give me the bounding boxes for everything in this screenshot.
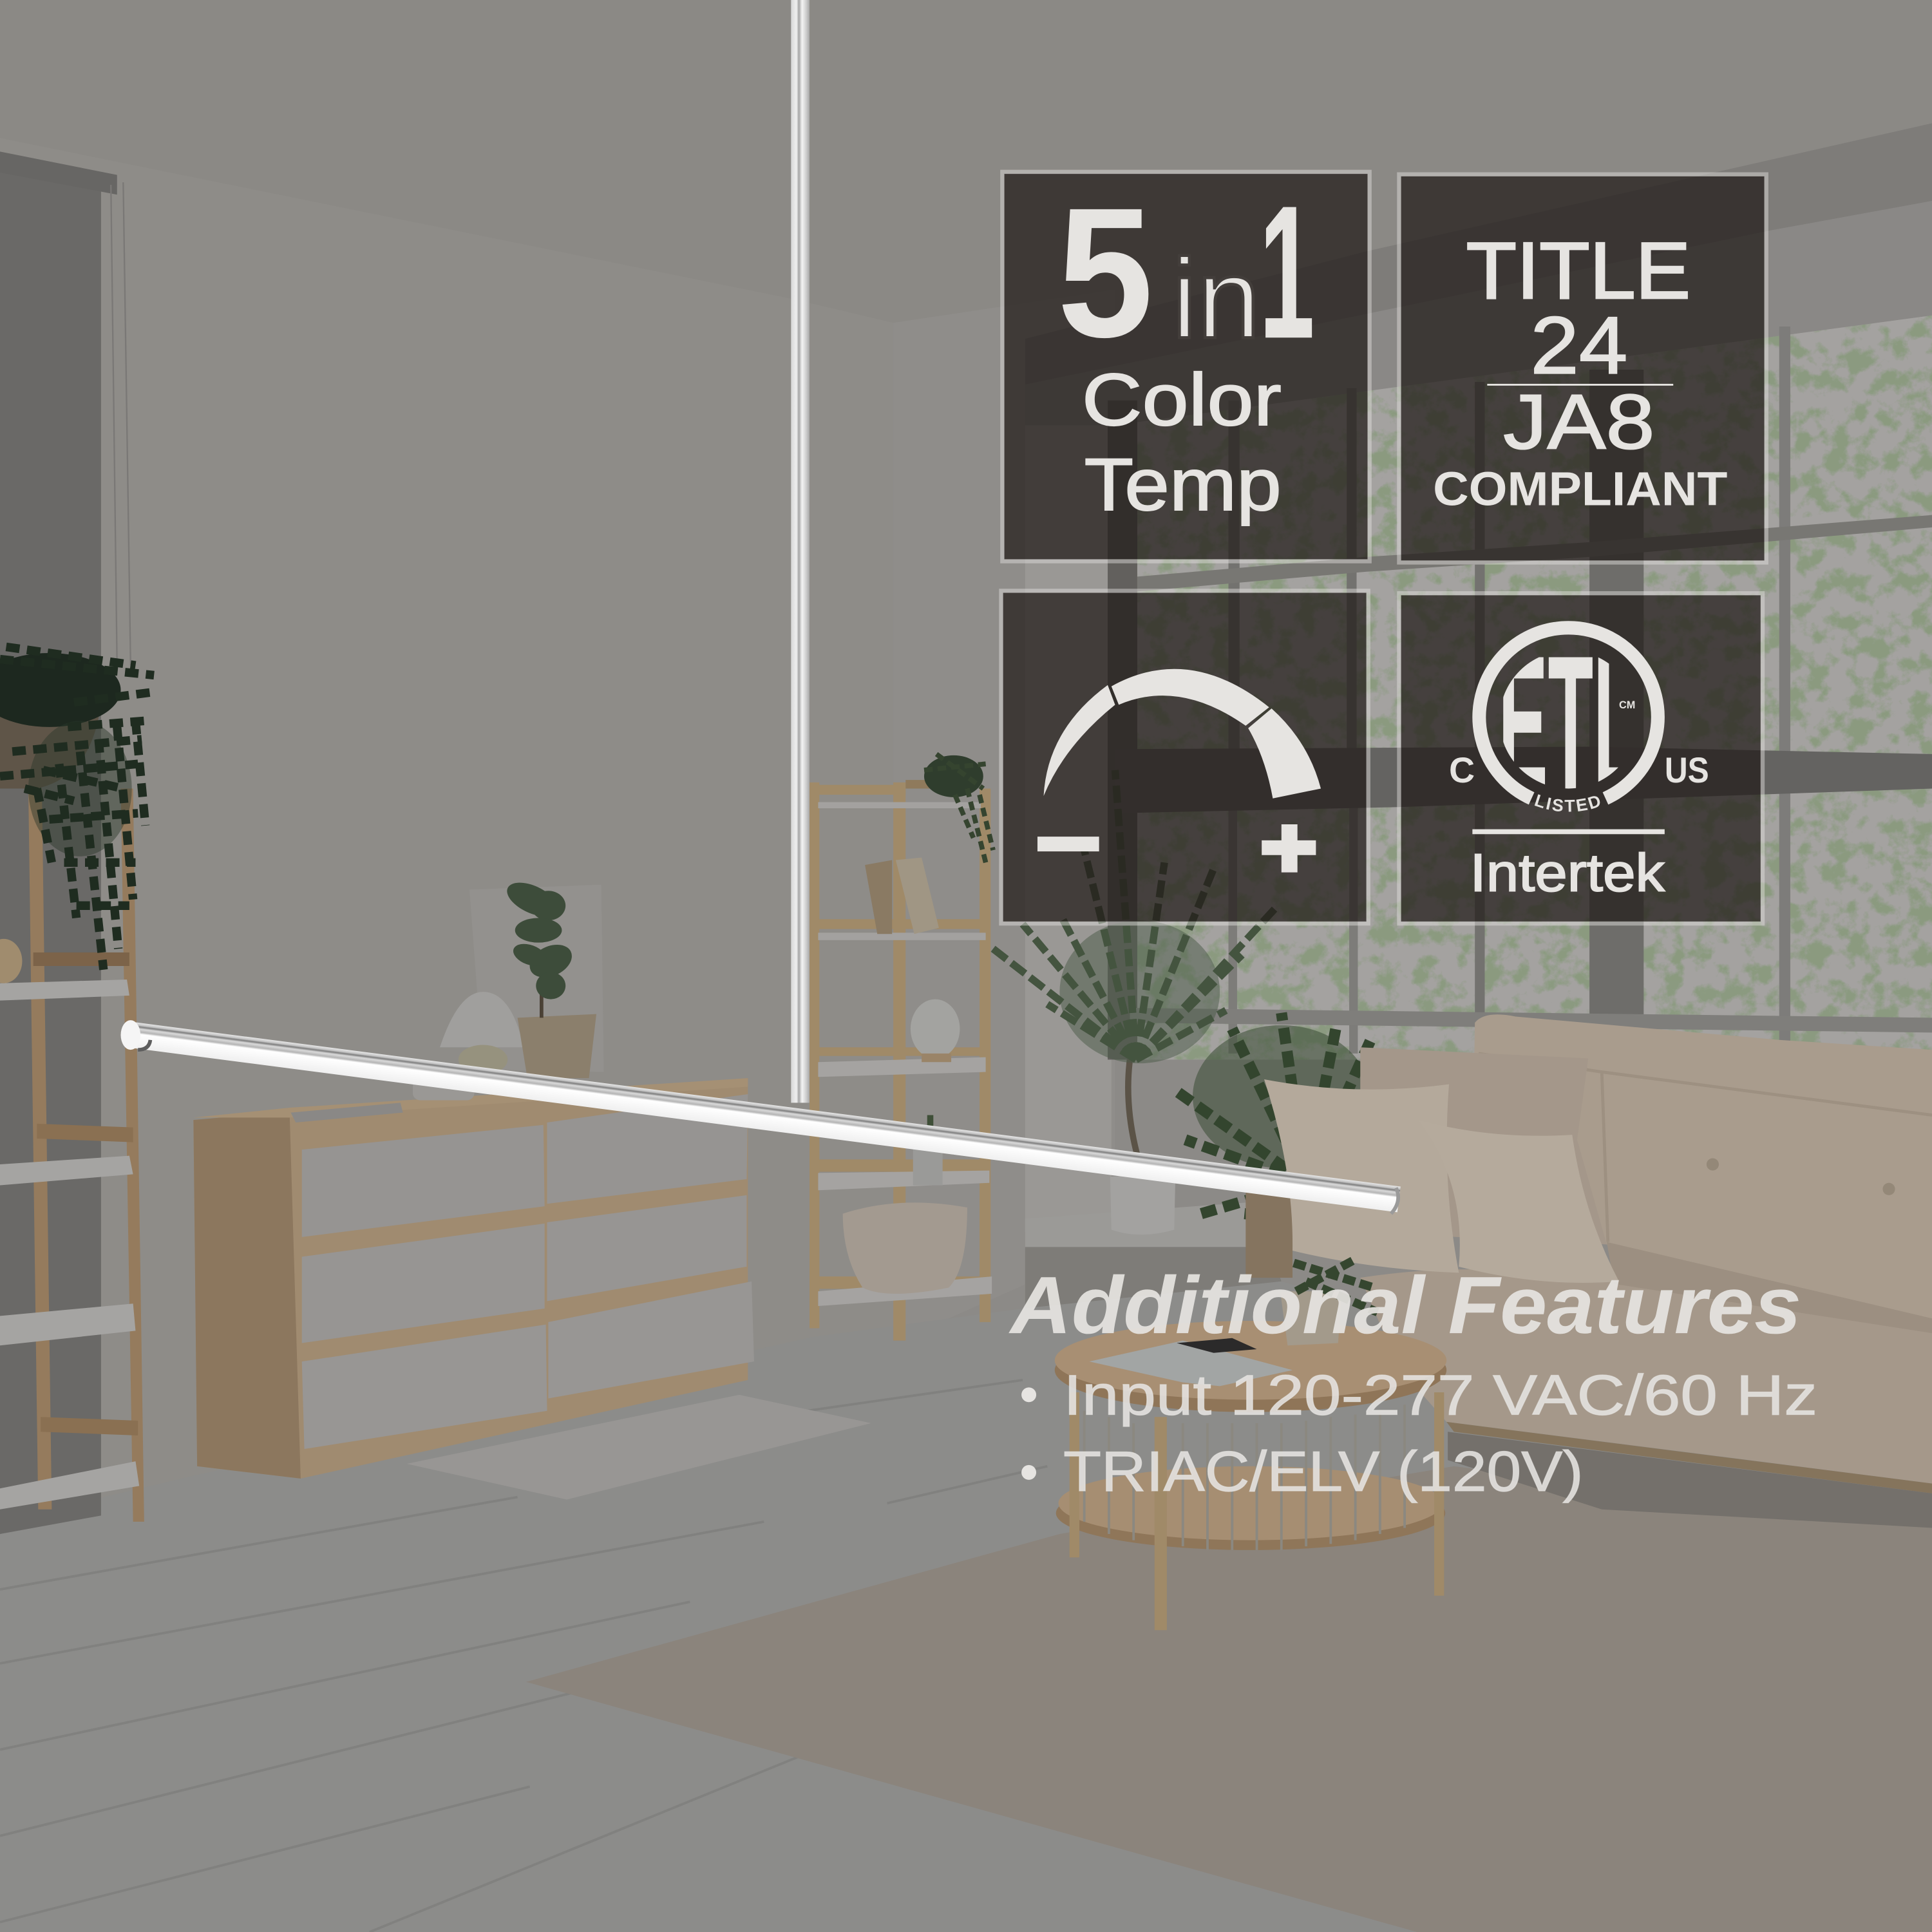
icon: plus: [1262, 824, 1316, 873]
color temp label: [1082, 359, 1282, 526]
fiddle leaf foliage: [502, 876, 577, 999]
hanging plant: [0, 647, 154, 970]
phone: [1177, 1338, 1257, 1353]
pillow: [1418, 1120, 1619, 1283]
wall beside window: [1025, 419, 1112, 1232]
left window blind: [0, 151, 131, 1534]
panel: 5 in 1 color temp: [1002, 166, 1370, 561]
white planter: [1110, 1173, 1175, 1235]
tree leaves: [993, 770, 1278, 1059]
bullet list: TRIAC/ELV (120V): [1063, 1439, 1584, 1503]
wood sofa frame: [1245, 1191, 1293, 1278]
icon: ETL listed mark: C: [1449, 750, 1475, 790]
dresser: [193, 1078, 754, 1479]
icon: minus: [1037, 837, 1099, 851]
seat cushion: [1360, 1269, 1932, 1484]
icon: dimming gauge: [1044, 669, 1321, 799]
leafy plant behind sofa: [1175, 1013, 1370, 1220]
left shelving unit: [0, 788, 144, 1522]
JA8 compliant text: COMPLIANT: [1433, 461, 1727, 515]
sofa: [1245, 1014, 1932, 1493]
tablet on dresser: [291, 1103, 403, 1122]
basket: [843, 1202, 967, 1294]
right shelving unit: [810, 754, 993, 1341]
icon: ETL listed mark: ETL: [1499, 616, 1639, 829]
ceiling beam over window: [1025, 123, 1932, 425]
lamp and plant on dresser: [413, 876, 604, 1101]
icon: ETL listed mark: LISTED: [1534, 794, 1600, 811]
bullet list: Input 120-277 VAC/60 Hz: [1063, 1363, 1817, 1426]
additional features text block: [1009, 1260, 1817, 1503]
color temp label: Temp: [1084, 444, 1282, 526]
right wall: [893, 290, 1115, 1343]
leaf strands: [0, 647, 154, 970]
5 in 1 heading: [1057, 166, 1314, 378]
window with foliage: [1108, 308, 1932, 1059]
panel: ETL listed: [1397, 591, 1765, 926]
dense top foliage: [0, 653, 121, 727]
back cushion: [1360, 1047, 1607, 1244]
pendant: linear light bar: [121, 1020, 1401, 1214]
window sill: [1025, 1201, 1263, 1247]
title 24 text: 24: [1530, 300, 1627, 391]
color temp label: Color: [1082, 359, 1282, 441]
window frames: [1108, 327, 1932, 1059]
title 24 text: TITLE: [1466, 226, 1690, 316]
door mat: [406, 1395, 871, 1499]
Intertek label: Intertek: [1470, 844, 1665, 902]
wall under window: [1025, 1247, 1282, 1312]
5 in 1 heading: 5: [1057, 169, 1153, 375]
JA8 compliant text: JA8: [1503, 378, 1655, 465]
coffee table: [1055, 1259, 1446, 1630]
statue and pot: [1280, 1291, 1342, 1345]
small plant with pot: [908, 1115, 955, 1152]
bullet list: [1021, 1363, 1817, 1503]
panel: Title 24 JA8 compliant: [1399, 175, 1766, 562]
woven planter: [0, 703, 101, 788]
pillow: [1264, 1079, 1459, 1273]
icon: ETL listed mark: [1449, 621, 1709, 811]
ceiling: [0, 0, 1932, 323]
floor: [0, 1282, 1932, 1932]
icon: ETL listed mark: CM: [1619, 699, 1635, 711]
top plant: [924, 755, 983, 797]
icon: ETL listed mark: US: [1665, 750, 1709, 790]
icon: round basket: [0, 939, 22, 983]
left wall: [0, 138, 893, 1522]
pendant: vertical suspension rod: [791, 0, 810, 1103]
books: [865, 860, 892, 934]
heading: Additional Features: [1009, 1260, 1801, 1350]
sofa shadow on floor: [1448, 1432, 1932, 1528]
table lamp: [911, 999, 960, 1058]
rug: [526, 1466, 1932, 1932]
5 in 1 heading: in: [1172, 236, 1260, 362]
title 24 text: [1466, 226, 1690, 391]
JA8 compliant text: [1433, 378, 1727, 515]
tree plant by window: [993, 770, 1278, 1235]
5 in 1 heading: 1: [1259, 166, 1314, 378]
magazine: [1089, 1341, 1293, 1386]
panel: dimmable: [1001, 591, 1368, 923]
small table plant: [1294, 1259, 1378, 1312]
